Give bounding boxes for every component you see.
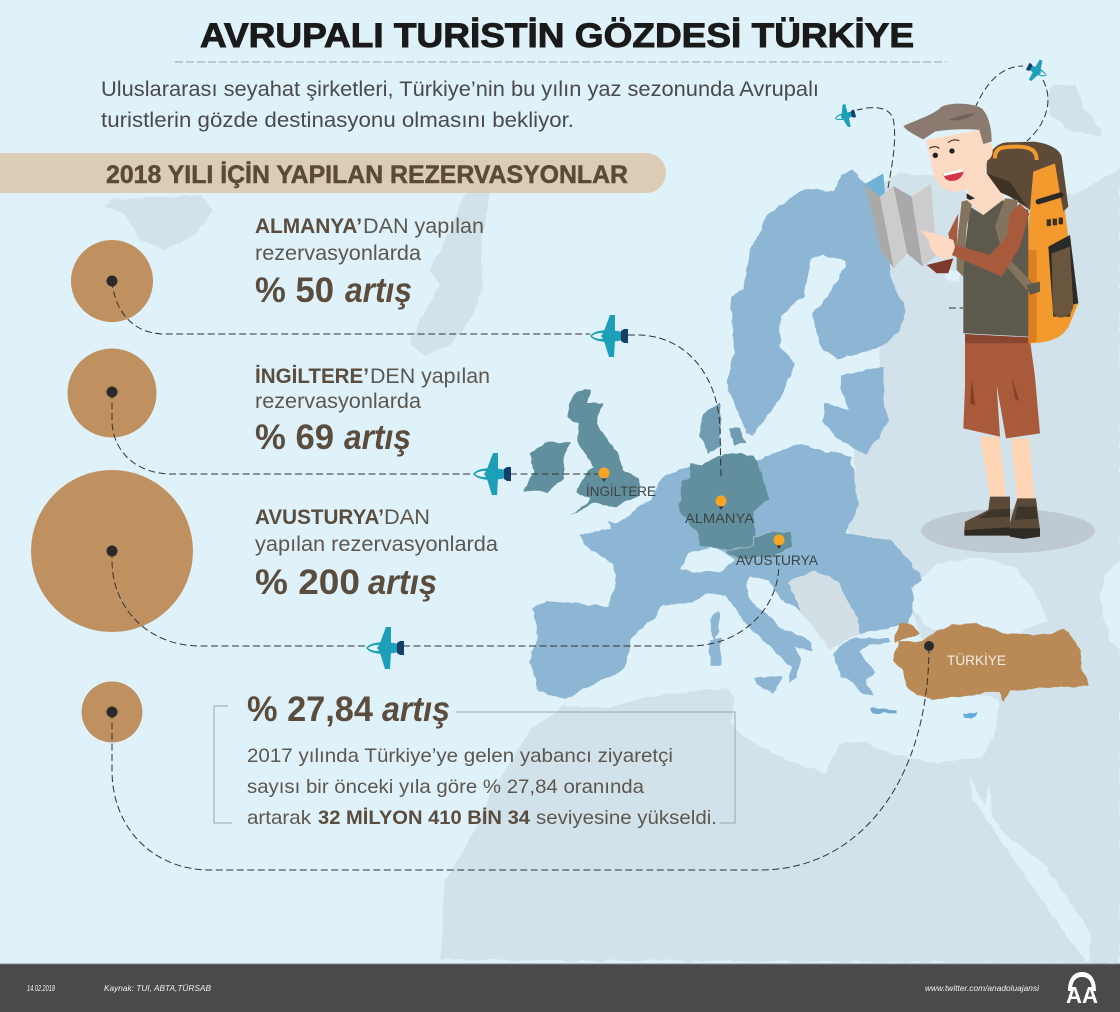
pin: Avusturya xyxy=(774,534,784,549)
map xyxy=(864,173,885,197)
callout box: Türkiye: sayısı bir önceki yıla göre % 27,84 oranında xyxy=(247,776,644,798)
label: Türkiye: TÜRKİYE xyxy=(947,651,1006,668)
label: Almanya: ALMANYA xyxy=(685,510,755,526)
Austria xyxy=(727,531,792,560)
United Kingdom and Ireland xyxy=(524,389,641,517)
pin: Almanya xyxy=(716,496,726,510)
shorts xyxy=(963,338,1040,438)
dashed route lines xyxy=(112,66,1048,870)
shadow xyxy=(921,509,1095,553)
banner heading: 2018 YILI İÇİN YAPILAN REZERVASYONLAR xyxy=(106,161,628,189)
callout box: Türkiye xyxy=(214,690,735,829)
Greece xyxy=(833,638,890,697)
Balkans xyxy=(788,571,861,649)
hand xyxy=(920,230,955,259)
stat text: Almanya: artış xyxy=(345,271,412,310)
eyes and mouth xyxy=(933,153,938,158)
banner heading xyxy=(0,153,666,193)
stat text: Avusturya: % 200 xyxy=(255,563,360,602)
callout box: Türkiye: 2017 yılında Türkiye’ye gelen yabancı ziyaretçi xyxy=(247,745,673,767)
stat text: İngiltere: rezervasyonlarda xyxy=(255,390,421,413)
stat text: Almanya: ALMANYA’ xyxy=(255,215,362,238)
icon: plane Almanya route xyxy=(590,315,628,357)
boots xyxy=(964,497,1010,530)
torso xyxy=(963,200,1028,337)
stat text: Almanya: DAN yapılan xyxy=(363,215,484,238)
Switzerland xyxy=(681,547,734,572)
circle: İngiltere xyxy=(68,348,156,438)
stat text: Avusturya: AVUSTURYA’ xyxy=(255,506,384,529)
label: İngiltere: İNGİLTERE xyxy=(586,482,656,499)
stat text: İngiltere: DEN yapılan xyxy=(370,365,490,388)
straps xyxy=(957,198,973,277)
pin: İngiltere xyxy=(598,468,610,482)
icon: small plane left xyxy=(832,102,858,130)
pin: Türkiye xyxy=(924,641,934,651)
hair xyxy=(903,104,992,144)
backpack xyxy=(1027,162,1078,343)
map: Europe xyxy=(524,169,923,699)
stat text: İngiltere: İNGİLTERE’ xyxy=(255,365,369,388)
footer xyxy=(0,964,1120,1012)
footer: www.twitter.com/anadoluajansi xyxy=(925,983,1040,993)
icon: plane İngiltere route xyxy=(473,453,511,495)
callout box: Türkiye: % 27,84 xyxy=(247,690,374,729)
neck xyxy=(967,173,1005,215)
title: AVRUPALI TURİSTİN GÖZDESİ TÜRKİYE xyxy=(200,17,914,55)
Germany xyxy=(679,453,769,551)
stat text: İngiltere xyxy=(255,365,490,457)
footer: 14.02.2018 xyxy=(27,983,55,993)
circle dots xyxy=(106,276,118,718)
circle: Avusturya xyxy=(31,470,193,632)
intro text: Uluslararası seyahat şirketleri, Türkiye’nin bu yılın yaz sezonunda Avrupalı xyxy=(101,78,819,101)
illustration: backpacker xyxy=(864,104,1095,553)
arm xyxy=(948,213,958,253)
intro text xyxy=(101,78,819,132)
intro text: turistlerin gözde destinasyonu olmasını bekliyor. xyxy=(101,109,574,132)
icon: plane Avusturya route xyxy=(366,627,404,669)
stat text: Almanya xyxy=(255,215,484,310)
footer: Kaynak: TUI, ABTA,TÜRSAB xyxy=(104,983,211,993)
map: Turkey xyxy=(872,623,1089,719)
stat text: Avusturya: artış xyxy=(368,563,437,602)
circle: Türkiye xyxy=(82,682,142,742)
European Union countries xyxy=(530,169,923,699)
label: Avusturya: AVUSTURYA xyxy=(736,552,819,568)
legs xyxy=(980,437,1006,497)
logo: AA: AA xyxy=(1066,982,1098,1008)
icon: small plane right xyxy=(1022,56,1052,86)
stat text: Almanya: rezervasyonlarda xyxy=(255,242,421,265)
callout box: Türkiye: seviyesine yükseldi. xyxy=(536,807,717,829)
stat text: Avusturya: yapılan rezervasyonlarda xyxy=(255,533,498,556)
stat text: İngiltere: % 69 xyxy=(255,418,334,457)
stat text: Avusturya: DAN xyxy=(384,506,430,529)
stat text: İngiltere: artış xyxy=(344,418,411,457)
head xyxy=(979,142,993,160)
callout box: Türkiye: 32 MİLYON 410 BİN 34 xyxy=(318,806,530,829)
callout box: Türkiye: artarak xyxy=(247,807,311,829)
stat text: Avusturya xyxy=(255,506,498,602)
stat text: Almanya: % 50 xyxy=(255,271,334,310)
callout box: Türkiye: artış xyxy=(382,690,450,729)
circle: Almanya xyxy=(71,240,153,322)
background land: ghost map xyxy=(105,85,1120,963)
